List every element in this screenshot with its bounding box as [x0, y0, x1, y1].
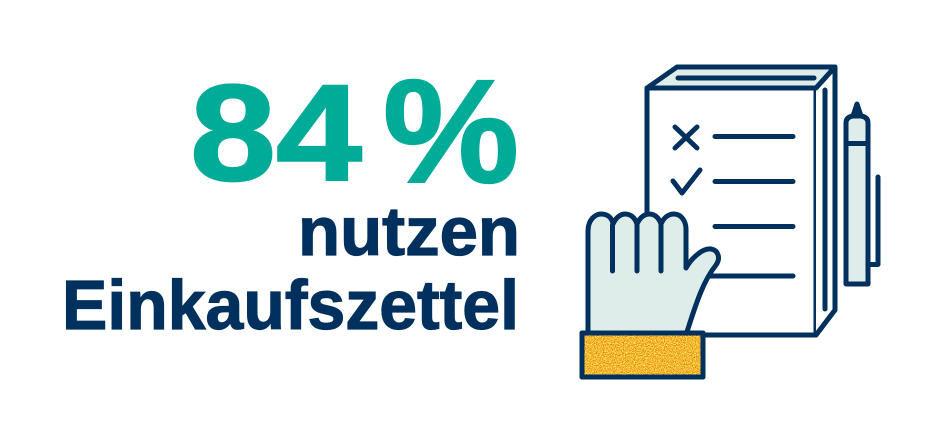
icon: pen: [846, 104, 878, 284]
list lines: [710, 136, 793, 276]
finger lines: [612, 225, 661, 271]
headline: 84 %: %: [383, 50, 519, 214]
icon: list check: [673, 170, 700, 193]
headline: 84 %: 84: [190, 57, 362, 210]
text: nutzen: nutzen: [298, 193, 520, 270]
illustration: hand on shopping list with pen: [582, 67, 878, 377]
text: Einkaufszettel: Einkaufszettel: [62, 266, 519, 344]
icon: hand: [588, 214, 718, 335]
icon: notepad: [647, 67, 835, 335]
icon: sleeve cuff: [582, 333, 703, 377]
icon: list cross: [675, 127, 697, 148]
